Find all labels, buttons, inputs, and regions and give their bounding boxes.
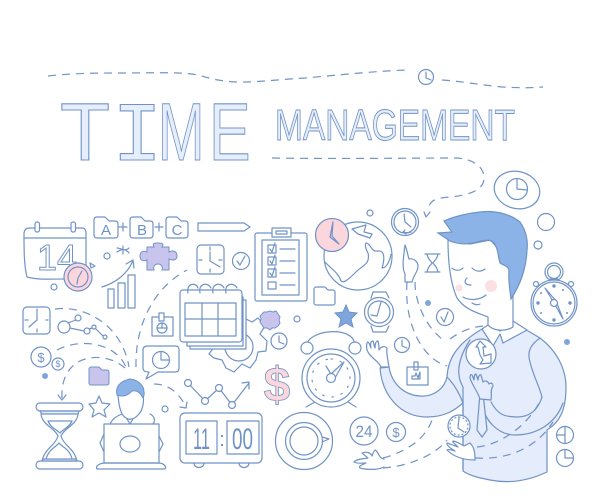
small clock (394, 338, 410, 352)
line chart with arrow (184, 380, 249, 408)
digital clock: 00 (232, 423, 253, 456)
star outline (89, 396, 110, 417)
top dashed line with clock (48, 70, 543, 88)
folder A: A (101, 222, 111, 239)
id badge (407, 362, 428, 385)
clock with 24 (350, 417, 378, 445)
dashed fan lines from person (55, 270, 187, 400)
title word: TIME: E (209, 87, 251, 178)
dollar coin right: $ (392, 425, 400, 440)
dollar coins (31, 347, 64, 379)
plus sign (155, 223, 163, 231)
wall clock top (392, 208, 418, 236)
inner torso lines (459, 340, 470, 470)
laptop (104, 424, 159, 463)
dashed arrow under title (272, 158, 484, 217)
pink clock (316, 218, 348, 252)
calendar page 14 (24, 222, 86, 279)
large hourglass (36, 403, 83, 469)
title (60, 86, 515, 186)
hair (438, 211, 527, 299)
pie chart (556, 426, 574, 444)
globe with pink clock (316, 218, 392, 290)
calendar page 14: 14 (37, 237, 77, 278)
network nodes (58, 315, 107, 339)
folder C (166, 217, 188, 239)
badge icon (152, 313, 173, 336)
hair (117, 379, 144, 398)
arrows icon coin (466, 339, 496, 369)
right sleeve lines (491, 338, 542, 417)
cheeks (456, 280, 497, 292)
tie (477, 393, 487, 437)
upper hand (470, 374, 493, 400)
gear (209, 318, 267, 372)
purple gear and small clock (260, 311, 300, 349)
pie chart bubble (490, 166, 544, 214)
pink dollar sign: $ (264, 359, 291, 412)
dollar coins: $ (55, 359, 61, 369)
coffee cup (276, 412, 332, 470)
wall calendar (180, 284, 246, 349)
right side icons (556, 339, 574, 466)
left lower hand (354, 450, 384, 469)
raised left arm (380, 367, 463, 417)
plus sign (119, 223, 127, 231)
title word: TIME (60, 86, 251, 186)
folder C: C (172, 222, 183, 239)
title word: TIME: I (112, 91, 162, 186)
speech bubble with pie (143, 346, 179, 379)
dollar coins: $ (37, 350, 45, 365)
folder B (130, 217, 153, 239)
check circle (232, 252, 250, 270)
square clock (197, 245, 224, 274)
title word: MANAGEMENT: MANAGEMENT (275, 101, 515, 150)
folder (314, 287, 335, 305)
digital clock: : (219, 429, 225, 451)
stopwatch compass (531, 263, 577, 326)
digital clock: 11 (193, 423, 210, 456)
closed eyes, nose and mouth (452, 268, 486, 305)
clipboard checklist (255, 228, 307, 301)
purple puzzle piece (140, 243, 177, 270)
blue dot and check (425, 300, 454, 326)
small hourglass (425, 254, 440, 272)
dashed arcs from pointing hand (407, 282, 487, 366)
folder B: B (137, 222, 147, 239)
small circle (51, 284, 57, 290)
folder A (94, 217, 118, 239)
dollar coin right (386, 422, 406, 442)
face (448, 240, 513, 330)
star blue (335, 305, 357, 327)
pink stopwatch (64, 263, 95, 291)
clock with 24: 24 (356, 422, 372, 441)
title word: TIME: T (60, 87, 110, 178)
rising arrow and bars (102, 260, 135, 308)
torso (447, 322, 566, 482)
raised hand (367, 341, 389, 367)
title word: TIME: M (158, 86, 204, 178)
alarm clock (301, 332, 361, 407)
wrist clock (448, 415, 470, 437)
lower hand (447, 441, 475, 460)
purple folder (89, 367, 109, 385)
dashed arcs from hands (383, 397, 553, 468)
decorative circles right (367, 210, 554, 249)
person at laptop (97, 379, 166, 469)
pie chart (556, 450, 574, 466)
digital clock (180, 413, 262, 468)
man (380, 211, 566, 482)
pointing hand (403, 245, 418, 282)
dashed arrow to chart (154, 384, 187, 412)
pencil bar (198, 223, 250, 231)
square clock left (23, 307, 50, 334)
collar (482, 321, 527, 346)
small symbols (104, 246, 129, 259)
watch (364, 292, 394, 332)
